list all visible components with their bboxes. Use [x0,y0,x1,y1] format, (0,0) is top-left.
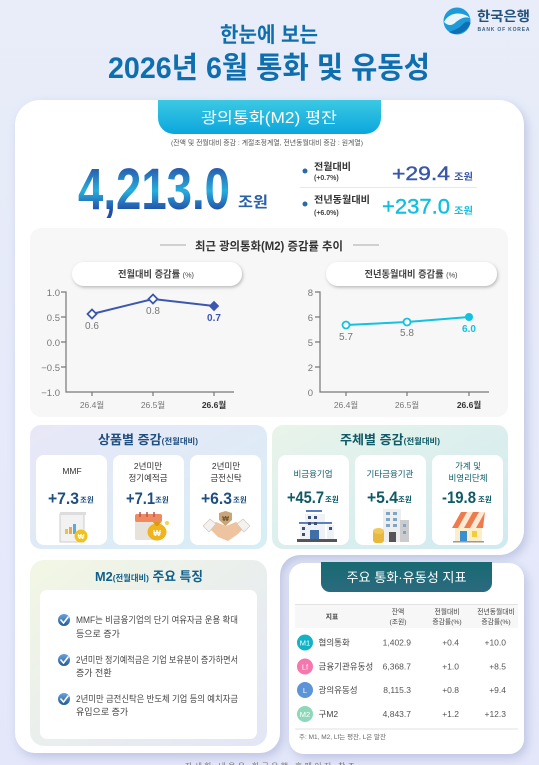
row: L [297,682,506,698]
table header: 잔액 [392,607,404,616]
stat: month over month: +29.4 [392,163,450,185]
logo: Bank of Korea: 한국은행 [477,9,530,24]
chart: year over year: 5.8 [400,328,414,339]
feature item 2 [58,654,238,678]
card: households: -19.8 [442,488,476,507]
panel: M2 growth trend [30,228,508,417]
stat: month over month: (+0.7%) [314,175,339,182]
row: old M2: 4,843.7 [383,709,411,719]
row: old M2: +12.3 [484,709,506,719]
card: time deposits: 정기예적금 [128,473,168,483]
logo: Bank of Korea [444,8,530,34]
card: non-financial firms: 비금융기업 [293,469,333,479]
panel: by sector [272,425,508,549]
chart: year over year: 6.0 [462,324,476,335]
icon: calendar with money bag: ₩ [153,529,161,538]
feature item 3 [58,693,238,717]
card: households: 가계 및 [455,461,481,471]
chart: year over year: 26.6월 [457,400,481,410]
row: old M2: 구M2 [318,709,338,719]
stat: month over month [302,161,473,185]
table header: 증감률(%) [432,618,462,626]
chart: year over year: 5 [308,338,313,349]
card: MMF: MMF [62,466,82,476]
feature item 3: 유입으로 증가 [76,706,128,717]
feature item 1: MMF는 비금융기업의 단기 여유자금 운용 확대 [76,614,238,625]
card: MMF: +7.3 [48,489,79,508]
product heading: 상품별 증감 (전월대비) [98,433,198,447]
row: old M2: M2 [300,710,310,719]
chart: month over month: 0.8 [146,306,160,317]
title: 2026년 6월 통화 및 유동성 [108,52,430,85]
feature item 1 [58,614,238,639]
row: M1: 1,402.9 [383,638,411,648]
row: Lf: 6,368.7 [383,662,411,672]
feature item 2: 2년미만 정기예적금은 기업 보유분이 증가하면서 [76,654,238,665]
table header: (조원) [389,617,407,626]
card: MMF [36,455,107,545]
row: Lf: Lf [302,662,309,672]
stat: year over year [302,194,473,218]
card: time deposits: 2년미만 [134,461,162,471]
card: non-financial firms: +45.7 [287,488,324,507]
row: Lf: 금융기관유동성 [318,662,373,672]
row: M1: +10.0 [484,638,506,648]
card: time deposits: 조원 [155,494,169,504]
row: M1: +0.4 [442,638,459,648]
chart: month over month: 0.7 [207,313,221,324]
icon: store [452,512,485,542]
row: M1: M1 [300,638,310,648]
card: households: 비영리단체 [448,473,488,483]
table header: 전월대비 [434,607,460,616]
table header: 전년동월대비 [477,607,515,616]
card: money trust: 조원 [233,494,247,504]
card: households: 조원 [478,494,492,504]
panel: key indicators table [289,562,524,754]
panel: M2 key features [30,560,267,746]
row: L: L [303,686,307,695]
title: 한눈에 보는 [220,24,318,47]
card: time deposits: +7.1 [126,489,155,508]
chart: year over year: 5.7 [339,332,353,343]
chart: year over year: 0 [308,388,313,399]
row: L: 광의유동성 [318,685,358,695]
feature item 3: 2년미만 금전신탁은 반도체 기업 등의 예치자금 [76,693,238,704]
chart: year over year: 26.4월 [334,400,358,410]
chart: year over year: 2 [308,363,313,374]
row: old M2: +1.2 [442,709,459,719]
card: other financial institutions: 조원 [398,494,412,504]
icon: report chart with coin: ₩ [78,534,85,541]
stat: month over month: 전월대비 [314,161,351,173]
chart: month over month: 전월대비 증감률 (%) [118,268,194,280]
big number: 조원 [238,194,268,211]
card: other financial institutions: 기타금융기관 [367,469,414,479]
stat: year over year: 전년동월대비 [314,194,370,206]
row: L: +0.8 [442,685,459,695]
row: M1 [297,634,506,650]
icon: building with coins [373,509,409,543]
features heading: M2(전월대비) 주요 특징 [95,569,203,584]
chart: month over month: 26.6월 [202,400,226,410]
table heading pill [321,562,492,592]
heading pill: M2 [158,100,381,134]
card: other financial institutions [355,455,426,545]
row: L: +9.4 [489,685,506,695]
row: Lf: +1.0 [442,662,459,672]
note text: (잔액 및 전월대비 증감 : 계절조정계열, 전년동월대비 증감 : 원계열) [171,138,363,147]
card: MMF: 조원 [80,494,94,504]
table heading pill: 주요 통화·유동성 지표 [346,570,467,585]
chart: month over month: −0.5 [41,363,60,374]
table footnote: 주: M1, M2, Lf는 평잔, L은 말잔 [299,732,386,741]
logo: Bank of Korea: BANK OF KOREA [478,27,530,33]
row: Lf: +8.5 [489,662,506,672]
icon: office building [297,510,337,542]
stat: month over month: 조원 [454,171,473,183]
chart: month over month: 0.0 [47,338,60,349]
card: non-financial firms: 조원 [325,494,339,504]
row: M1: 협의통화 [318,638,350,648]
chart: month over month: 1.0 [47,288,60,299]
card: non-financial firms [278,455,349,545]
feature item 2: 증가 전환 [76,667,112,678]
table header: 증감률(%) [481,618,511,626]
card: money trust: 2년미만 [212,461,240,471]
table header [295,604,518,628]
chart: year over year: 26.5월 [395,400,419,410]
chart: month over month: 26.4월 [80,400,104,410]
chart: month over month [41,262,242,410]
row: Lf [297,658,506,674]
chart: year over year: 전년동월대비 증감률 (%) [364,268,458,280]
stat: year over year: +237.0 [382,194,450,218]
chart: year over year [308,262,497,410]
big number: 4,213.0 [78,157,230,222]
card: money trust: 금전신탁 [210,473,242,483]
row: L: 8,115.3 [383,685,411,695]
card: money trust: +6.3 [201,489,232,508]
panel: by product [30,425,267,549]
chart: year over year: 8 [308,288,313,299]
stat: year over year: 조원 [454,205,473,217]
card: time deposits [113,455,184,545]
sector heading: 주체별 증감 (전월대비) [340,433,440,447]
trend heading: 최근 광의통화(M2) 증감률 추이 [195,239,343,253]
title [108,24,430,85]
chart: month over month: −1.0 [41,388,60,399]
card: households [432,455,503,545]
chart: month over month: 0.5 [47,313,60,324]
table header: 지표 [326,612,338,621]
chart: month over month: 26.5월 [141,400,165,410]
chart: month over month: 0.6 [85,321,99,332]
chart: year over year: 6 [308,313,313,324]
feature item 1: 등으로 증가 [76,629,120,639]
card: money trust [190,455,261,545]
card: other financial institutions: +5.4 [367,488,399,507]
stat: year over year: (+6.0%) [314,210,339,217]
row: old M2 [297,706,506,722]
icon: handshake with shield: ₩ [222,516,229,523]
heading pill: M2: 광의통화(M2) 평잔 [201,109,337,127]
